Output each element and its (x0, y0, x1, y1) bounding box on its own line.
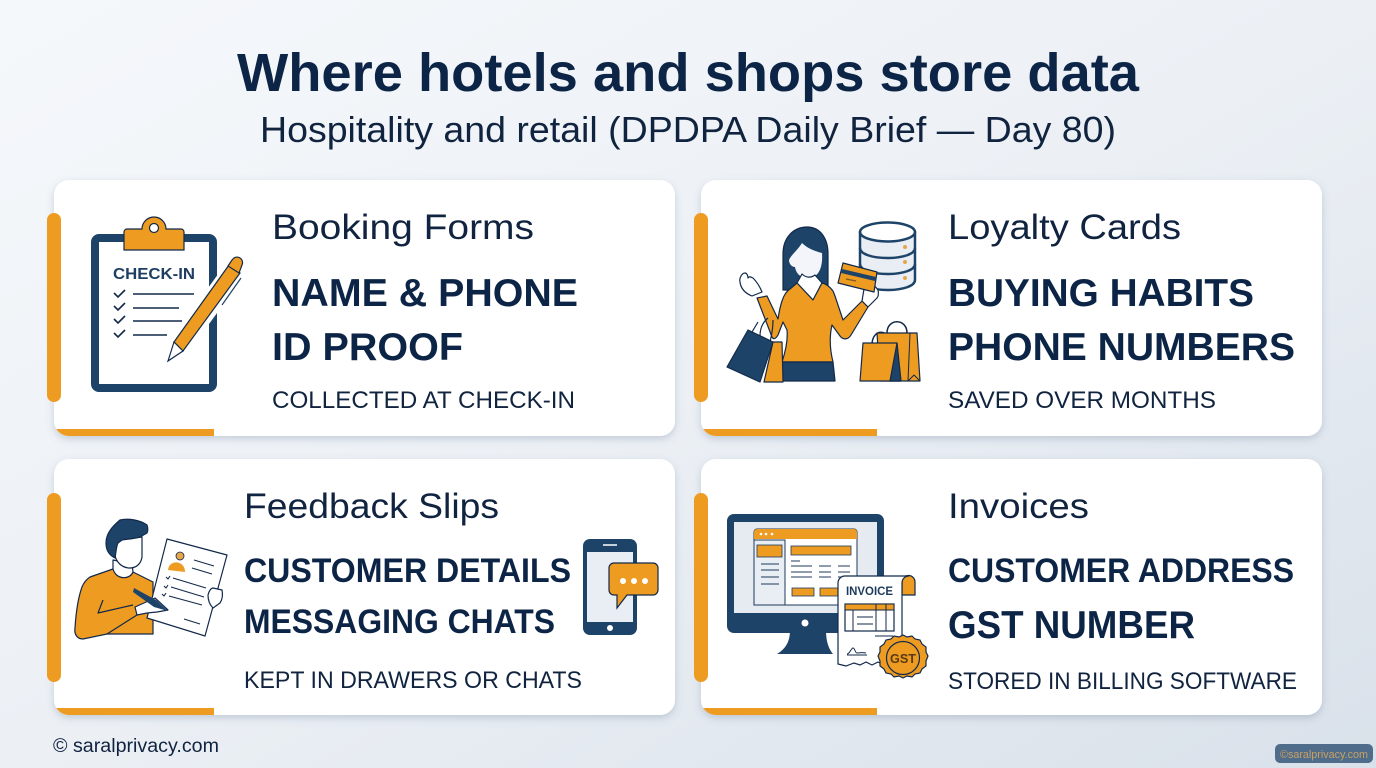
icon: billing monitor, invoice and GST seal (727, 514, 928, 678)
watermark badge: ©saralprivacy.com (1280, 749, 1368, 761)
text: phone numbers: PHONE NUMBERS (948, 326, 1295, 369)
text: buying habits: BUYING HABITS (948, 272, 1254, 315)
text: messaging chats: MESSAGING CHATS (244, 603, 555, 641)
text: collected at check-in: COLLECTED AT CHECK-IN (272, 387, 575, 414)
icon: check-in clipboard: CHECK-IN (113, 266, 195, 283)
icon: check-in clipboard (95, 217, 244, 388)
subtitle: Hospitality and retail (DPDPA Daily Brief — Day 80) (260, 109, 1116, 150)
icon: billing monitor, invoice and GST seal: INVOICE (846, 584, 893, 598)
text: gst number: GST NUMBER (948, 604, 1195, 647)
text: kept in drawers or chats: KEPT IN DRAWERS OR CHATS (244, 667, 582, 694)
text: customer address: CUSTOMER ADDRESS (948, 552, 1294, 590)
text: customer details: CUSTOMER DETAILS (244, 552, 571, 590)
heading: loyalty cards: Loyalty Cards (948, 208, 1181, 247)
icon: person filling feedback form (75, 519, 227, 639)
icon: billing monitor, invoice and GST seal: GST (890, 651, 916, 666)
icon: phone with chat bubble (583, 539, 658, 635)
footer credit: © saralprivacy.com (53, 736, 219, 757)
text: id proof: ID PROOF (272, 326, 463, 369)
text: stored in billing software: STORED IN BILLING SOFTWARE (948, 668, 1297, 695)
heading: feedback slips: Feedback Slips (244, 487, 499, 526)
heading: booking forms: Booking Forms (272, 208, 534, 247)
panel: feedback slips (47, 459, 675, 716)
text: name and phone: NAME & PHONE (272, 272, 578, 315)
panel: invoices (694, 459, 1322, 716)
panel: loyalty cards (694, 180, 1322, 437)
panel: booking forms (47, 180, 675, 437)
heading: invoices: Invoices (948, 487, 1089, 526)
icon: woman shopping with card and database (727, 222, 920, 382)
title: Where hotels and shops store data (237, 43, 1140, 103)
watermark badge (1275, 744, 1373, 763)
text: saved over months: SAVED OVER MONTHS (948, 387, 1216, 414)
